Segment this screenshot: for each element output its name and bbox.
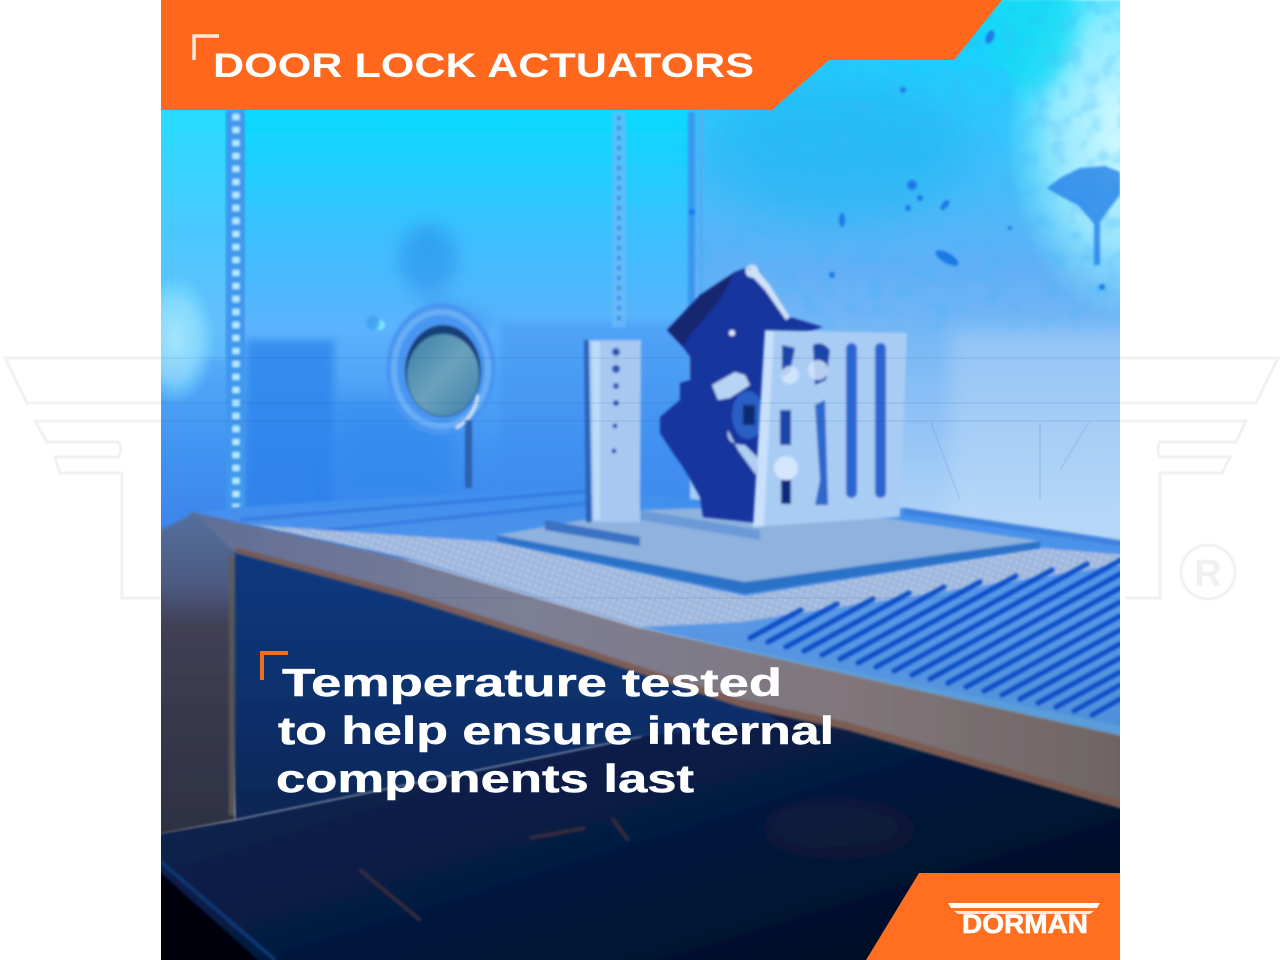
title: DOOR LOCK ACTUATORS	[213, 47, 754, 85]
chamber floor	[161, 710, 1120, 960]
watermark: registered mark	[1181, 545, 1235, 599]
shelf front rail	[190, 512, 1140, 814]
right chamber wall	[686, 0, 1120, 540]
header banner	[161, 0, 1002, 110]
caption copy	[276, 662, 834, 801]
caption corner bracket	[262, 653, 288, 680]
light strip on rail edge	[640, 628, 1140, 743]
caption copy: to help ensure internal	[278, 710, 834, 753]
header corner bracket	[194, 36, 219, 60]
perforated rail: left	[226, 110, 245, 510]
panel: chamber photo illustration	[161, 0, 1120, 960]
caption copy: components last	[276, 758, 694, 801]
left support leg	[161, 512, 236, 834]
wall stains	[689, 29, 1120, 290]
left mounting plate	[584, 340, 641, 522]
Dorman logo: DORMAN	[962, 909, 1088, 939]
logo badge	[866, 873, 1120, 960]
dark under-shelf wall	[225, 540, 780, 820]
test fixture base plate	[497, 505, 1040, 594]
door lock actuator	[660, 265, 823, 523]
perforated rail: centre	[612, 112, 626, 327]
slotted bracket	[753, 330, 907, 527]
Dorman logo	[948, 903, 1100, 939]
watermark: Dorman wings outline behind photo	[5, 358, 1278, 599]
watermark: registered mark: R	[1194, 553, 1222, 595]
wire grate shelf	[195, 486, 1140, 740]
caption copy: Temperature tested	[282, 662, 782, 705]
faint watermark over photo	[161, 358, 1120, 598]
caption text block	[262, 653, 834, 801]
left chamber wall	[135, 100, 695, 560]
grate slats	[750, 559, 1123, 715]
porthole window	[366, 303, 496, 488]
